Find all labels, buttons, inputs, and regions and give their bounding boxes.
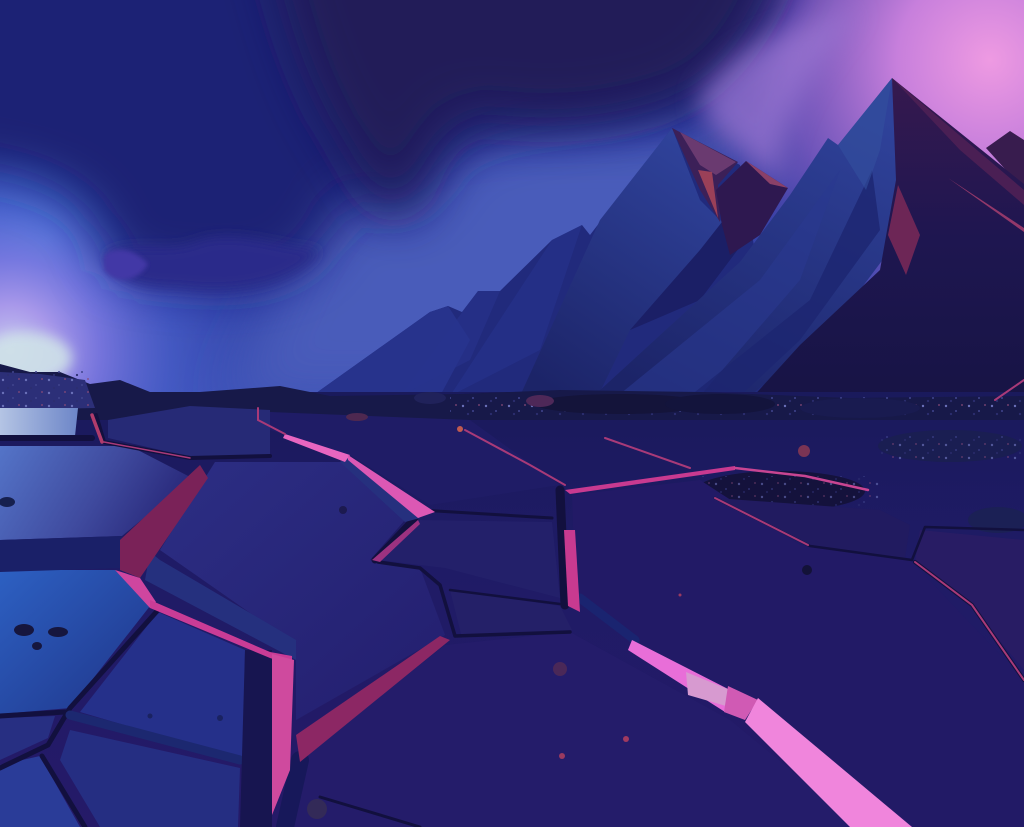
large peak: blue face bbox=[598, 78, 900, 396]
plate: right side bbox=[915, 530, 1024, 670]
plate: back left bbox=[108, 406, 270, 458]
small peak behind bbox=[716, 161, 788, 255]
plate: bottom centre bbox=[290, 632, 860, 827]
plate: back centre bbox=[270, 412, 560, 505]
panels: cracked ground plates bbox=[0, 406, 1024, 827]
clouds: light blue haze and dark storm masses bbox=[0, 0, 860, 400]
plate: left lower bbox=[0, 570, 150, 714]
pebbles bbox=[0, 413, 812, 819]
plate: water sliver top left bbox=[0, 408, 78, 436]
plate: lower left tile bbox=[80, 612, 245, 760]
broad dark wall faces of cracks bbox=[0, 456, 420, 827]
rubble along horizon bbox=[0, 364, 1024, 563]
sky bbox=[0, 0, 1024, 410]
plate: centre bbox=[378, 520, 560, 598]
far ridge left bbox=[312, 128, 780, 396]
middle peak blue face bbox=[520, 128, 722, 396]
large peak: dark face bbox=[750, 78, 1024, 400]
thin pink fissures bbox=[92, 380, 1024, 680]
glowing magenta cracks bbox=[115, 434, 912, 827]
ground bbox=[0, 392, 1024, 827]
mountains bbox=[312, 78, 1024, 400]
plate: right large bbox=[572, 480, 1024, 827]
plate: mid left large bbox=[160, 462, 445, 720]
far right peak bbox=[986, 131, 1024, 190]
plate: upper left bright bbox=[0, 446, 192, 540]
dark crack channels bbox=[0, 415, 1024, 827]
light horizon glow bbox=[0, 332, 72, 384]
